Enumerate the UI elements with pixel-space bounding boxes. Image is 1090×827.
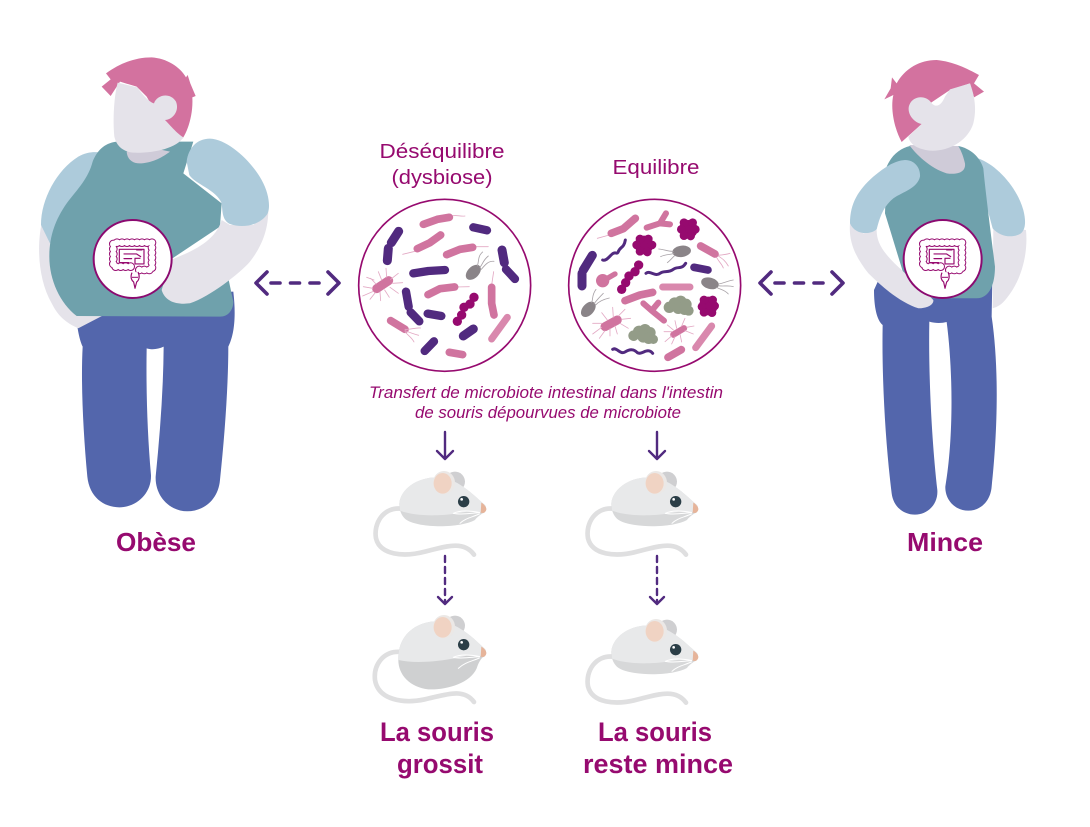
arrow: left mouse evolution — [438, 556, 452, 604]
label: mouse gains weight: La souris — [380, 717, 494, 747]
obese legs — [76, 292, 235, 511]
thin intestine icon — [904, 220, 982, 298]
label: mouse stays thin — [583, 717, 733, 779]
mouse: left before — [376, 471, 486, 555]
balanced bacteria — [578, 213, 733, 357]
panel: balanced microbiota — [569, 199, 741, 371]
mouse: right before — [588, 471, 698, 555]
thin legs — [874, 277, 997, 515]
heading: dysbiosis — [380, 140, 504, 189]
caption: microbiota transfer: de souris dépourvues de microbiote — [415, 404, 681, 422]
arrow: balance to thin — [760, 272, 843, 294]
label: mouse gains weight — [380, 717, 494, 779]
mouse: right thin — [588, 619, 698, 703]
caption: microbiota transfer — [369, 384, 723, 422]
mouse: left fat — [375, 615, 486, 702]
label: obese: Obèse — [116, 527, 196, 557]
caption: microbiota transfer: Transfert de microbiote intestinal dans l'intestin — [369, 384, 723, 402]
arrow: obese to dysbiosis — [256, 272, 339, 294]
arrow: right mouse evolution — [650, 556, 664, 604]
figure: obese person — [39, 57, 269, 511]
heading: balance: Equilibre — [612, 156, 700, 179]
label: thin: Mince — [907, 527, 983, 557]
obese intestine icon — [94, 220, 172, 298]
heading: dysbiosis: (dysbiose) — [392, 166, 492, 189]
arrow: transfer to left mouse — [437, 432, 453, 459]
arrow: transfer to right mouse — [649, 432, 665, 459]
obese upper body — [39, 57, 269, 328]
dysbiosis bacteria — [363, 216, 515, 355]
label: mouse stays thin: La souris — [598, 717, 712, 747]
heading: dysbiosis: Déséquilibre — [380, 140, 504, 163]
thin upper body — [850, 60, 1026, 308]
figure: thin person — [850, 60, 1026, 515]
label: mouse stays thin: reste mince — [583, 749, 733, 779]
panel: dysbiosis microbiota — [359, 199, 531, 371]
label: mouse gains weight: grossit — [397, 749, 483, 779]
